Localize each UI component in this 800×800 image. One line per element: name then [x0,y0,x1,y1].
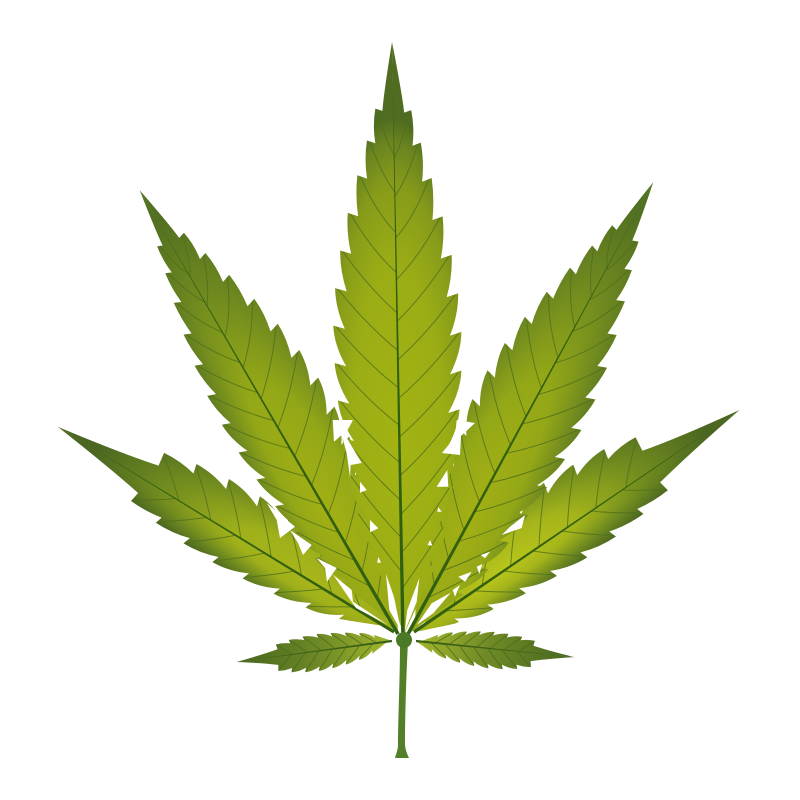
small right leaflet [414,624,576,677]
center leaflet [328,41,467,637]
leaf node [396,632,412,648]
lower left leaflet [39,387,418,662]
stem [395,642,409,758]
gaps between leaflets [267,420,525,640]
upper right leaflet [359,156,702,660]
upper left leaflet [99,160,450,658]
lower right leaflet [386,369,760,662]
underlay filling the overlap between leaflets [285,478,535,636]
small left leaflet [234,624,395,682]
